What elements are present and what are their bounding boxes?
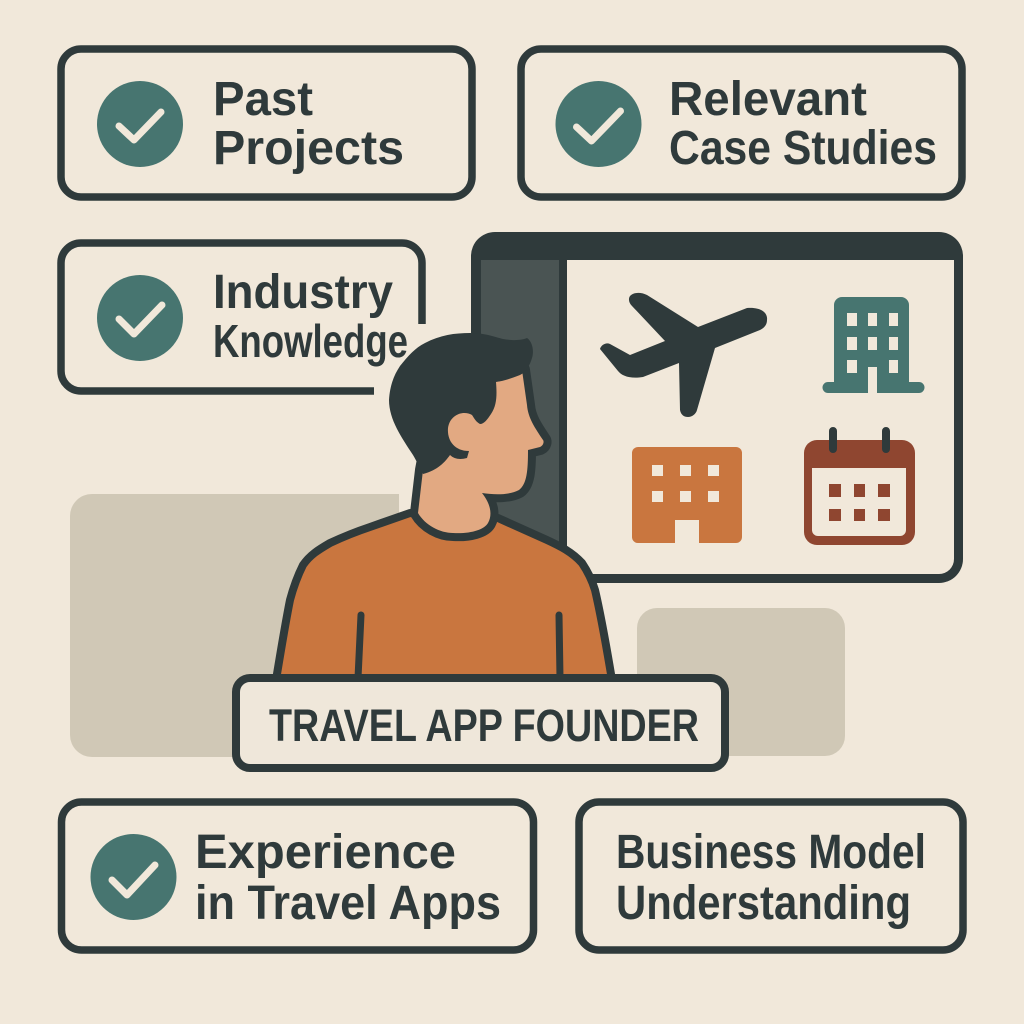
window content area [567,260,954,574]
icon: calendar [804,431,915,545]
window sidebar [481,260,559,583]
card: Experience in Travel Apps [62,802,534,950]
text: Experience in Travel Apps: in Travel Apps [195,877,501,930]
person body orange sweater [276,513,612,680]
icon: check badge relevant case studies [556,81,642,167]
text: Industry Knowledge: Industry [213,266,393,319]
text: Business Model Understanding: Understanding [616,877,911,930]
background panel: right beige block [637,608,845,756]
text: Past Projects: Projects [213,122,404,175]
person hair [389,333,533,474]
panel: app window [471,232,963,583]
text: Relevant Case Studies: Case Studies [669,122,937,175]
text: Industry Knowledge: Knowledge [213,315,408,367]
text: Experience in Travel Apps: Experience [195,826,456,879]
card: Relevant Case Studies [521,49,962,197]
icon: teal building [822,297,924,393]
label: Travel App Founder [236,678,725,768]
person head and neck skin [418,370,544,533]
icon: check badge industry knowledge [97,275,183,361]
card: Industry Knowledge [61,243,422,391]
figure: travel app founder person [276,333,612,680]
icon: airplane [600,293,767,417]
background panel: left beige block [70,494,399,757]
icon: orange building [632,447,742,543]
text: Relevant Case Studies: Relevant [669,73,867,126]
text: Past Projects: Past [213,73,313,126]
icon: check badge past projects [97,81,183,167]
sweater arm lines [358,615,560,678]
card: Past Projects [61,49,472,197]
text: Business Model Understanding: Business Model [616,826,926,879]
card: Business Model Understanding [579,802,963,950]
label: Travel App Founder: TRAVEL APP FOUNDER [269,700,699,751]
icon: check badge experience [90,834,176,920]
